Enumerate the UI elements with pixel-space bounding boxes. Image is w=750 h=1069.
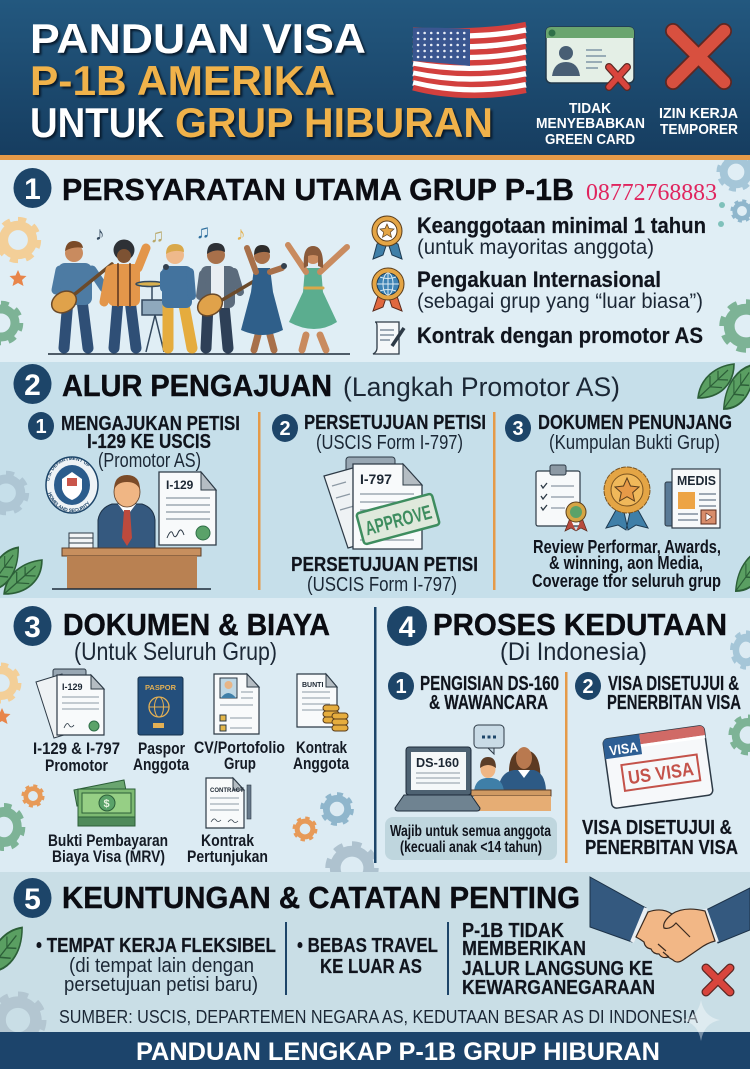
panel: alur pengajuan: [14, 364, 732, 596]
step badge: [28, 412, 54, 440]
document labels row 1: Anggota: [133, 756, 190, 774]
icon: checklist clipboard: [536, 465, 587, 531]
benefit: free travel: [297, 935, 438, 978]
step text: MENGAJUKAN PETISI: [61, 413, 240, 435]
step: visa approved: [575, 672, 741, 859]
icon: US visa card: VISA: [608, 739, 639, 759]
number badge 3: [14, 606, 52, 646]
icon: media newspaper: MEDIS: [677, 473, 716, 488]
icon: passport: [138, 677, 183, 735]
document labels row 1: Promotor: [45, 757, 108, 775]
document labels row 1: [33, 739, 350, 775]
label: temporary work permit: TEMPORER: [660, 121, 738, 138]
text: requirements list: (untuk mayoritas anggota): [417, 236, 654, 259]
guitarist with vest: [194, 243, 256, 348]
benefit: flexible workplace: [36, 935, 276, 996]
panel: proses kedutaan: [385, 606, 741, 863]
document labels row 1: Kontrak: [296, 739, 348, 757]
step text: (Kumpulan Bukti Grup): [549, 432, 720, 454]
text: requirements list: Pengakuan Internasional: [417, 267, 661, 292]
heading: DOKUMEN & BIAYA: [63, 607, 330, 642]
icon: CV portfolio: [214, 674, 259, 734]
number badge 1: 1: [24, 173, 41, 206]
step badge: [575, 672, 601, 700]
step text: I-129 KE USCIS: [87, 431, 211, 453]
icon: US visa card: US VISA: [627, 759, 695, 789]
icon: passport: PASPOR: [145, 685, 176, 692]
icon: green card with red cross: [546, 27, 634, 87]
icon: banknotes: [74, 780, 135, 826]
panel: keuntungan dan catatan: [14, 877, 750, 1027]
step text: PERSETUJUAN PETISI: [304, 412, 486, 434]
music notes: ♪: [236, 224, 246, 245]
document labels row 1: CV/Portofolio: [194, 739, 285, 757]
step text: [304, 412, 486, 454]
document labels row 2: Biaya Visa (MRV): [52, 848, 165, 866]
panel: persyaratan utama: [14, 168, 717, 354]
icon: I-129 and I-797 documents: I-129: [62, 682, 83, 692]
heading: (Di Indonesia): [500, 638, 647, 666]
heading: ALUR PENGAJUAN: [62, 368, 332, 403]
approve stamp: APPROVE: [363, 502, 434, 540]
icon: interview with laptop: [395, 725, 551, 811]
icon: homeland security seal: [45, 456, 99, 514]
woman dancer in green dress: [288, 245, 347, 350]
step badge: 2: [582, 676, 594, 698]
heading: KEUNTUNGAN & CATATAN PENTING: [62, 880, 580, 915]
note: no citizenship path: MEMBERIKAN: [462, 938, 586, 960]
step badge: 1: [395, 676, 407, 698]
step text: & WAWANCARA: [429, 692, 548, 714]
document labels row 2: [48, 832, 268, 866]
sources: SUMBER: USCIS, DEPARTEMEN NEGARA AS, KEDUTAAN BESAR AS DI INDONESIA: [59, 1007, 698, 1027]
title: UNTUK: [30, 99, 164, 146]
number badge 2: 2: [24, 369, 41, 402]
title: GRUP HIBURAN: [175, 99, 493, 146]
note: no citizenship path: KEWARGANEGARAAN: [462, 977, 655, 999]
icon: contract with coins: BUNTI: [302, 682, 323, 689]
icon: contract with coins: [297, 674, 348, 731]
label: green card note: [536, 100, 645, 148]
icon: approved I-797: I-797: [360, 471, 392, 487]
step text: [61, 413, 240, 472]
step badge: 2: [279, 418, 291, 440]
document labels row 1: Paspor: [138, 740, 185, 758]
step text: (USCIS Form I-797): [316, 432, 463, 454]
number badge 3: 3: [24, 611, 41, 644]
step text lower: (USCIS Form I-797): [307, 574, 457, 596]
icon: I-129 document: I-129: [166, 478, 194, 492]
step 3: [505, 412, 732, 591]
callout: mandatory note: (kecuali anak <14 tahun): [400, 839, 542, 856]
music notes: [95, 222, 246, 247]
document labels row 1: Anggota: [293, 755, 350, 773]
label: temporary work permit: [659, 105, 738, 138]
step badge: [505, 414, 531, 442]
divider: [493, 412, 496, 590]
step text: [538, 412, 732, 454]
callout: mandatory note: [385, 817, 557, 860]
benefit: flexible workplace: persetujuan petisi baru): [64, 974, 258, 996]
supporting evidence text: & winning, aon Media,: [549, 553, 703, 573]
document labels row 2: Pertunjukan: [187, 848, 268, 866]
heading: [63, 607, 330, 666]
benefit: free travel: KE LUAR AS: [320, 956, 422, 978]
title: P-1B AMERIKA: [30, 57, 335, 104]
music notes: ♫: [196, 222, 210, 243]
music notes: ♫: [150, 226, 164, 247]
icon: handshake: [590, 877, 750, 962]
document labels row 1: I-129 & I-797: [33, 740, 120, 758]
step text: [607, 673, 741, 714]
phone number: 08772768883: [586, 180, 717, 206]
label: green card note: TIDAK: [569, 100, 611, 117]
number badge 1: [14, 168, 52, 208]
label: temporary work permit: IZIN KERJA: [659, 105, 738, 122]
document labels row 1: Grup: [224, 755, 256, 773]
step badge: 1: [35, 416, 47, 438]
heading: (Untuk Seluruh Grup): [74, 638, 277, 666]
icon: homeland security seal: HOMELAND SECURITY: [48, 492, 90, 512]
callout: mandatory note: Wajib untuk semua anggota: [390, 823, 551, 840]
document labels row 2: Bukti Pembayaran: [48, 832, 168, 850]
divider: [285, 922, 287, 995]
heading: PROSES KEDUTAAN: [433, 607, 727, 642]
note: no citizenship path: P-1B TIDAK: [462, 920, 564, 942]
step badge: [272, 414, 298, 442]
step text: PENGISIAN DS-160: [420, 673, 559, 695]
icon: award medal: [604, 467, 650, 530]
label: green card note: GREEN CARD: [545, 131, 635, 148]
heading: [62, 368, 620, 403]
benefit: flexible workplace: • TEMPAT KERJA FLEKSIBEL: [36, 935, 276, 957]
number badge 2: [14, 364, 52, 404]
heading: (Langkah Promotor AS): [343, 372, 620, 402]
step: DS-160: [385, 672, 559, 860]
icon: I-129 and I-797 documents: [36, 669, 104, 738]
divider: [447, 922, 449, 995]
step text lower: PERSETUJUAN PETISI: [291, 554, 478, 576]
number badge 5: 5: [24, 883, 41, 916]
benefit: free travel: • BEBAS TRAVEL: [297, 935, 438, 957]
icon: media newspaper: [665, 469, 720, 528]
document labels row 2: Kontrak: [201, 832, 255, 850]
guitarist: [48, 241, 112, 348]
blond singer: [162, 244, 192, 348]
step text lower: [582, 817, 738, 859]
step 2: [272, 412, 486, 596]
step text lower: [291, 554, 478, 596]
note: no citizenship path: [462, 920, 655, 999]
note: no citizenship path: JALUR LANGSUNG KE: [462, 958, 653, 980]
divider: [565, 672, 568, 863]
number badge 4: 4: [399, 611, 416, 644]
icon: I-129 document: [159, 472, 216, 545]
icon: promoter at desk: [52, 475, 211, 589]
woman singer in blue dress: [241, 245, 287, 350]
text: requirements list: Keanggotaan minimal 1 tahun: [417, 213, 706, 238]
step 1: [28, 412, 240, 590]
label: green card note: MENYEBABKAN: [536, 115, 645, 132]
divider: [258, 412, 260, 590]
icon: performance contract: CONTRACT: [210, 788, 244, 794]
footer bar: PANDUAN LENGKAP P-1B GRUP HIBURAN: [136, 1038, 660, 1066]
divider: [374, 607, 376, 863]
step badge: [388, 672, 414, 700]
panel: header: [0, 0, 750, 160]
heading: [433, 607, 727, 666]
supporting evidence text: [532, 537, 721, 591]
illustration: band musicians: [48, 222, 350, 354]
icon: interview with laptop: DS-160: [416, 755, 459, 770]
icon: globe medal: [372, 268, 404, 311]
icon: large red cross: [673, 31, 724, 82]
text: requirements list: [417, 213, 706, 348]
icon: star medal: [372, 216, 402, 259]
icon: red cross: [706, 968, 730, 992]
benefit: flexible workplace: (di tempat lain dengan: [69, 955, 254, 977]
icon: performance contract: [206, 778, 251, 828]
title: PANDUAN VISA: [30, 15, 366, 62]
icon: banknotes: $: [104, 798, 110, 810]
step text: (Promotor AS): [98, 450, 201, 472]
text: requirements list: Kontrak dengan promotor AS: [417, 323, 703, 348]
text: requirements list: (sebagai grup yang “luar biasa”): [417, 290, 703, 313]
drum kit: [136, 282, 168, 352]
icon: homeland security seal: U.S. DEPARTMENT OF: [47, 458, 90, 481]
number badge 5: [14, 878, 52, 918]
title: [30, 15, 493, 146]
icon: US visa card: [603, 725, 713, 809]
icon: approved I-797: [324, 457, 440, 549]
music notes: ♪: [95, 224, 104, 245]
footer bar: [0, 1032, 750, 1069]
icon: sparkle: [682, 1000, 720, 1041]
panel: dokumen dan biaya: [14, 606, 350, 866]
singer in orange: [104, 240, 146, 348]
number badge 4: [387, 606, 427, 646]
step text: [420, 673, 559, 714]
step badge: 3: [512, 418, 524, 440]
heading: PERSYARATAN UTAMA GRUP P-1B: [62, 172, 574, 207]
icon: contract with pen: [373, 322, 404, 354]
icon: american flag: [413, 25, 526, 95]
